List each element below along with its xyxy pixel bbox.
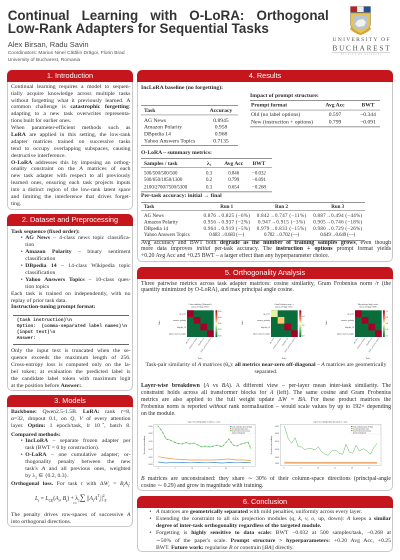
chart: layer-wise similarity of A matrices: 20 xyxy=(225,468,227,470)
chart: layer-wise similarity of BA product xyxy=(270,420,382,470)
chart: Gram Frobenius norm heatmap: 0.4 xyxy=(302,316,304,318)
text block: task sequence: • xyxy=(21,249,23,255)
text block: compared methods xyxy=(11,432,130,480)
chart: layer-wise similarity of A matrices: 0.000 xyxy=(148,464,153,466)
table: prompt structure: New (instruction + options) xyxy=(251,118,313,126)
chart: Gram Frobenius norm heatmap: Gram Frobenius norm / r xyxy=(275,304,294,306)
table: per-task accuracy: 0.979→0.833 (−15%) xyxy=(257,226,307,231)
chart: layer-wise similarity of BA product: 25 xyxy=(368,468,370,470)
text block: layer-wise breakdown: Frobenius norm is reported without rank normalisation – would scale values by up to 192× depending xyxy=(141,404,391,410)
chart: Gram Frobenius norm heatmap: (mean off-diag: 0.001) xyxy=(275,306,293,309)
text block: layer-wise breakdown: on the module. xyxy=(141,411,176,417)
table: IncLoRA accuracy: DBpedia 14 xyxy=(144,132,171,138)
chart: layer-wise similarity of BA product: Layer-wise orthogonality: BA matrices – mean xyxy=(314,420,347,424)
chart: cosine similarity heatmap: dbpedia_14 xyxy=(177,327,186,329)
chart: max principal angle cosine heatmap: yahoo_answers_topics xyxy=(337,334,354,336)
panel: orthogonality analysis xyxy=(137,267,393,491)
text block: compared methods: Compared methods: xyxy=(11,432,61,438)
table: per-task accuracy: 0.649→0.649 (—) xyxy=(320,232,356,237)
text block: layer-wise breakdown xyxy=(141,383,391,417)
table: per-task accuracy: 0.905→0.746 (−18%) xyxy=(313,220,363,225)
heading: 6. Conclusion: 6. Conclusion xyxy=(243,497,287,506)
chart: layer-wise similarity of BA product: 15 xyxy=(334,468,336,470)
table: prompt structure: BWT xyxy=(361,102,375,108)
chart: layer-wise similarity of BA product: Gram Frobenius norm (mean) xyxy=(353,429,371,432)
chart: layer-wise similarity of A matrices: 10 xyxy=(191,468,193,470)
text block: truncation and loss: at the position before Answer:. xyxy=(11,383,83,389)
table: O-LoRA summary metrics: 0.654 xyxy=(228,185,240,190)
text block: penalty effect xyxy=(11,512,130,525)
table: O-LoRA summary metrics: −0.032 xyxy=(252,171,266,176)
chart: max principal angle cosine heatmap: ag_news xyxy=(353,337,359,345)
table: per-task accuracy: Run 1 xyxy=(220,204,234,209)
table: O-LoRA summary metrics xyxy=(141,158,272,192)
text block: conclusions xyxy=(149,509,391,551)
text block: task sequence: Instruction-tuning prompt format: xyxy=(11,304,96,310)
table: prompt structure: 0.799 xyxy=(329,120,341,126)
chart: layer-wise similarity of A matrices: cosine similarity (mean off-diag) xyxy=(232,425,252,428)
text block: pairwise metrics: Three pairwise metrics across task adapter matrices: cosine similarity, Gram Frobenius norm /r (the xyxy=(141,280,391,286)
chart: layer-wise similarity of BA product: cosine similarity (mean off-diag) xyxy=(353,425,373,428)
chart: layer-wise similarity of BA product: 0.000 xyxy=(275,463,279,465)
table: IncLoRA accuracy: 0.8945 xyxy=(213,118,229,124)
text block: introduction: tions built for earlier ones. xyxy=(11,118,71,124)
text block: task sequence: classification xyxy=(25,270,55,276)
table: O-LoRA summary metrics: BWT xyxy=(253,161,266,167)
chart: layer-wise similarity of BA product: 0 xyxy=(284,468,285,470)
chart: layer-wise similarity of BA product: max principal angle cosine xyxy=(353,427,369,430)
chart: cosine similarity heatmap: Cosine similarity (Rademach) xyxy=(189,303,212,306)
table: per-task accuracy: 0.887→0.494 (−44%) xyxy=(313,214,363,219)
chart: cosine similarity heatmap: (mean off-diag: 0.003) xyxy=(191,306,209,309)
text block: task sequence: Yahoo Answers Topics – 10-class ques- xyxy=(25,277,130,283)
text block: compared methods: • xyxy=(21,438,23,444)
chart: Gram Frobenius norm heatmap: ag_news xyxy=(269,337,275,345)
chart: layer-wise similarity of A matrices: Gram Frobenius norm (mean) xyxy=(232,429,250,432)
chart: layer-wise similarity of BA product: Mean inter-task similarity xyxy=(271,436,273,454)
title: Low-Rank Adapters for Sequential Tasks xyxy=(8,21,269,36)
chart: Gram Frobenius norm heatmap: amazon_polarity xyxy=(257,320,270,322)
table: prompt structure: −0.091 xyxy=(360,120,376,126)
chart: Gram Frobenius norm heatmap: dbpedia_14 xyxy=(261,327,270,329)
text block: task sequence: • xyxy=(21,277,23,283)
table: per-task accuracy: 0.702→0.702 (—) xyxy=(264,232,299,237)
table: O-LoRA summary metrics: 0.3 xyxy=(206,185,213,190)
text block: compared methods: by λ1 ∈ {0.2, 0.3}. xyxy=(25,473,69,480)
chart: max principal angle cosine heatmap: dbpedia_14 xyxy=(345,327,354,329)
text block: compared methods: IncLoRA – separate frozen adapter per xyxy=(25,438,130,444)
text block: truncation and loss: Cross-entropy loss is computed only on the la- xyxy=(11,362,130,368)
heading: 3. Models xyxy=(7,395,133,407)
chart: max principal angle cosine heatmap: Max principal angle cosine xyxy=(358,303,378,306)
text block: introduction: LoRA are applied in this setting, the low-rank xyxy=(11,132,130,138)
chart: Gram Frobenius norm heatmap: 0.0 xyxy=(302,336,304,338)
chart: layer-wise similarity of BA product: 0.010 xyxy=(275,449,279,451)
chart: cosine similarity heatmap: amazon_polarity xyxy=(189,338,198,349)
text block: introduction: destructive interference. xyxy=(11,153,66,159)
text block: backbone: α=32, dropout 0.1, on Q, V of every attention xyxy=(11,416,130,422)
text block: introduction: Continual learning requires a model to sequen- xyxy=(11,84,130,90)
text block: conclusions: BWT. Future work: regularise B or constrain ||BA|| directly. xyxy=(156,545,294,551)
chart: layer-wise similarity of A matrices: 15 xyxy=(208,468,210,470)
chart: layer-wise similarity of A matrices: Mean inter-task similarity xyxy=(144,436,146,454)
text block: task sequence: Amazon Polarity – binary sentiment xyxy=(25,249,130,255)
text block: compared methods: • xyxy=(21,452,23,458)
table: prompt structure: Avg Acc xyxy=(325,102,345,108)
table: per-task accuracy: 0.947→0.915 (−3%) xyxy=(258,220,305,225)
text block: conclusions: ∼50% of the paper's scale. Prompt structure > hyperparameters: +0.20 Avg Acc, +0.25 xyxy=(156,538,391,544)
heading: 1. Introduction xyxy=(7,70,133,82)
logo wordmark: FACULTY OF SCIENCES xyxy=(341,53,381,56)
panel: models xyxy=(7,395,133,527)
text block: task sequence xyxy=(11,229,130,310)
text block: B matrices xyxy=(141,476,391,489)
text block: layer-wise breakdown: constraint holds across all transformer blocks for A (left). The same cosine and Gram Frobenius xyxy=(141,390,391,396)
table: O-LoRA summary metrics: Avg Acc xyxy=(224,161,244,167)
text block: compared methods: thogonality penalty between the new xyxy=(25,459,130,465)
chart: cosine similarity heatmap: Task i xyxy=(159,320,161,325)
icon: crest xyxy=(350,6,371,35)
chart: cosine similarity heatmap xyxy=(158,303,222,360)
table: per-task accuracy: Amazon Polarity xyxy=(144,220,179,225)
chart: cosine similarity heatmap: yahoo_answers_topics xyxy=(200,338,212,353)
text block: introduction: O-LoRA addresses this by imposing an orthog- xyxy=(11,160,130,166)
text block: introduction: new task adapter with respect to all previously xyxy=(11,173,130,179)
text block: results summary: Avg accuracy and BWT both degrade as the number of training samples grows, even though xyxy=(141,240,391,246)
heading: per-task accuracy: Per-task accuracy: initial → final xyxy=(141,193,222,199)
chart: max principal angle cosine heatmap: amazon_polarity xyxy=(357,338,366,349)
logo: University of Bucharest xyxy=(332,6,390,56)
text block: task sequence: Task sequence (fixed order): xyxy=(11,229,80,235)
text block: introduction: tend to occupy overlapping subspaces, causing xyxy=(11,146,130,152)
chart: max principal angle cosine heatmap: 0.4 xyxy=(386,329,388,331)
chart: layer-wise similarity of BA product: 10 xyxy=(317,468,319,470)
logo wordmark xyxy=(332,37,390,56)
caption: heatmaps: separated. xyxy=(255,369,277,375)
table: O-LoRA summary metrics: 2100/2700/7500/5300 xyxy=(144,185,188,190)
text block: truncation and loss: Only the input text is truncated when the se- xyxy=(11,348,130,354)
chart: cosine similarity heatmap: 0.20 xyxy=(218,329,221,331)
table: per-task accuracy: 0.876→0.825 (−6%) xyxy=(203,214,250,219)
caption: heatmaps xyxy=(146,362,386,375)
chart: max principal angle cosine heatmap: yahoo_answers_topics xyxy=(368,338,380,353)
title: Continual Learning with O-LoRA: Orthogonal xyxy=(8,8,329,22)
panel: introduction xyxy=(7,70,133,210)
table: prompt structure: Prompt format xyxy=(251,102,287,108)
chart: cosine similarity heatmap: 0.60 xyxy=(218,317,221,319)
chart: max principal angle cosine heatmap: 0.2 xyxy=(386,336,388,338)
chart: layer-wise similarity of BA product: baseline (orthogonal) xyxy=(353,431,366,434)
text block: introduction: adapting to a new task overwrites representa- xyxy=(11,111,130,117)
text block: backbone xyxy=(11,409,130,429)
table: IncLoRA accuracy xyxy=(141,105,238,146)
chart: cosine similarity heatmap: yahoo_answers_topics xyxy=(169,334,186,336)
chart: layer-wise similarity of A matrices: Layer-wise orthogonality: A matrices – mean xyxy=(188,420,220,424)
text block: conclusions: Extending the constraint to all six projection modules (q, k, v, o, up, down): A keeps a similar xyxy=(156,516,391,522)
text block: introduction: learned ones, ensuring each task projects inputs xyxy=(11,180,130,186)
heading: 5. Orthogonality Analysis: 5. Orthogonality Analysis xyxy=(225,268,305,277)
chart: Gram Frobenius norm heatmap: Task j xyxy=(282,358,287,360)
table: IncLoRA accuracy: Accuracy xyxy=(210,108,233,114)
text block: penalty effect: The penalty drives row-spaces of successive A xyxy=(11,512,130,518)
panel: dataset and preprocessing xyxy=(7,214,133,391)
text block: introduction: into a distinct region of the low-rank latent space xyxy=(11,187,130,193)
text block: truncation and loss: quence exceeds the maximum length of 256. xyxy=(11,355,130,361)
text block: truncation and loss: bel token; at evaluation the predicted label is xyxy=(11,369,130,375)
table: O-LoRA summary metrics: Samples / task xyxy=(144,161,179,167)
table: prompt structure: Old (no label options) xyxy=(251,111,300,118)
chart: max principal angle cosine heatmap: 1.0 xyxy=(386,311,388,313)
table: O-LoRA summary metrics: −0.268 xyxy=(252,185,266,190)
text block: layer-wise breakdown: metrics are also applied to the full weight update ΔW = BA. For these product matrices the xyxy=(141,397,391,403)
text block: penalty effect: into orthogonal directions. xyxy=(11,519,71,525)
table: O-LoRA summary metrics: 500/650/1850/1300 xyxy=(144,178,183,183)
chart: max principal angle cosine heatmap: (mean off-diag: 0.008) xyxy=(359,306,377,309)
text block: introduction: adapter matrices trained on successive tasks xyxy=(11,139,130,145)
text block: task sequence: tion topics xyxy=(25,284,49,290)
chart: layer-wise similarity of BA product: 0.015 xyxy=(275,441,279,443)
header: title, authors and logo xyxy=(8,6,390,63)
table: per-task accuracy: DBpedia 14 xyxy=(144,226,169,231)
text block: truncation and loss: the candidate label token with maximum logit xyxy=(11,376,130,382)
table: O-LoRA summary metrics: 0.846 xyxy=(228,171,240,176)
text block: B matrices: cosine ∼ 0.29) and grow in magnitude with training. xyxy=(141,483,263,489)
coordinators: Coordinators: Marius Ninel Cătălin Drăgoi, Florin Brad xyxy=(8,51,125,56)
chart: layer-wise similarity of A matrices: 0.015 xyxy=(148,441,153,443)
panel: results xyxy=(137,70,393,262)
chart: Gram Frobenius norm heatmap: dbpedia_14 xyxy=(282,338,289,346)
table: per-task accuracy: AG News xyxy=(144,214,164,219)
chart: layer-wise similarity of BA product: 0.005 xyxy=(275,457,279,459)
table: IncLoRA accuracy: Yahoo Answers Topics xyxy=(144,138,195,144)
text block: task sequence: • xyxy=(21,235,23,241)
table: per-task accuracy: Yahoo Answers Topics xyxy=(144,232,190,237)
table: O-LoRA summary metrics: 0.799 xyxy=(228,178,240,183)
chart: Gram Frobenius norm heatmap: yahoo_answers_topics xyxy=(284,338,296,353)
text block: introduction: tially acquire knowledge across multiple tasks xyxy=(11,91,130,97)
text block: pairwise metrics: quantity minimized by O-LoRA), and max principal angle cosine. xyxy=(141,287,294,293)
heading: 2. Dataset and Preprocessing: 2. Dataset and Preprocessing xyxy=(22,215,118,224)
text block: task sequence: AG News – 4-class news topic classifica- xyxy=(25,235,130,241)
table: per-task accuracy: 0.980→0.729 (−26%) xyxy=(313,226,363,231)
table: O-LoRA summary metrics: 0.3 xyxy=(206,171,213,176)
chart: cosine similarity heatmap: 0.80 xyxy=(218,311,221,313)
chart: layer-wise similarity of BA product: 20 xyxy=(351,468,353,470)
text block: introduction: When parameter-efficient methods such as xyxy=(11,125,130,131)
text block: task sequence: DBpedia 14 – 14-class Wikipedia topic xyxy=(25,263,130,269)
table: per-task accuracy: Run 3 xyxy=(331,204,345,209)
chart: layer-wise similarity of A matrices: 0.010 xyxy=(148,449,153,451)
chart: Gram Frobenius norm heatmap xyxy=(242,304,304,360)
chart: max principal angle cosine heatmap: dbpedia_14 xyxy=(366,338,373,346)
text block: introduction: onality constraint on the A matrices of each xyxy=(11,166,130,172)
chart: layer-wise similarity of A matrices: 0.020 xyxy=(148,433,153,435)
table: O-LoRA summary metrics: λ₁ xyxy=(207,161,212,167)
chart: Gram Frobenius norm heatmap: Task i xyxy=(242,320,244,325)
text block: introduction: and limiting the interference that drives forget- xyxy=(11,194,130,200)
chart: layer-wise similarity of A matrices xyxy=(144,420,256,470)
chart: layer-wise similarity of A matrices: 25 xyxy=(242,468,244,470)
table: per-task accuracy: 0.956→0.937 (−2%) xyxy=(203,220,250,225)
heading: 3. Models: 3. Models xyxy=(54,396,86,405)
chart: max principal angle cosine heatmap: amazon_polarity xyxy=(341,320,354,322)
text block: introduction: without forgetting what it previously learned. A xyxy=(11,98,130,104)
title xyxy=(8,8,329,36)
text block: introduction: ting. xyxy=(11,201,21,207)
table: IncLoRA accuracy: Task xyxy=(144,108,156,114)
table: per-task accuracy: 0.683→0.683 (—) xyxy=(209,232,245,237)
text block: results summary: +0.20 Avg Acc and +0.25 BWT – a larger effect than any hyperparameter choice. xyxy=(141,253,329,259)
table: prompt structure xyxy=(250,100,380,128)
affiliation: University of Bucharest, Romania xyxy=(8,58,80,63)
text block: layer-wise breakdown: Layer-wise breakdown (A vs BA). A different view – per-layer mean inter-task similarity. The xyxy=(141,383,391,389)
text block: compared methods: task's A and all previous ones, weighted xyxy=(25,466,130,472)
table: per-task accuracy: 0.964→0.919 (−5%) xyxy=(203,226,250,231)
chart: layer-wise similarity of BA product: 5 xyxy=(301,468,302,470)
heading: 6. Conclusion xyxy=(137,496,393,508)
chart: layer-wise similarity of BA product: 0.025 xyxy=(275,426,279,428)
table: O-LoRA summary metrics: 0.2 xyxy=(206,178,213,183)
table: IncLoRA accuracy: AG News xyxy=(144,118,166,124)
heading: 4. Results: 4. Results xyxy=(249,71,281,80)
text block: conclusions: A matrices are geometrically separated with mild penalties, uniformly across every layer. xyxy=(156,509,362,515)
panel: conclusion: • xyxy=(149,530,151,536)
table: O-LoRA summary metrics: −0.091 xyxy=(252,178,266,183)
chart: Gram Frobenius norm heatmap: ag_news xyxy=(263,312,270,316)
text block: task sequence: • xyxy=(21,263,23,269)
logo wordmark: UNIVERSITY OF xyxy=(332,37,390,43)
chart: layer-wise similarity of A matrices: 0.005 xyxy=(148,457,153,459)
chart: cosine similarity heatmap: amazon_polarity xyxy=(173,320,186,322)
chart: layer-wise similarity of A matrices: 0 xyxy=(158,468,159,470)
caption: heatmaps: Task-pair similarity of A matrices (θ₀): all metrics near-zero off-diagonal – A matrices are geometrically xyxy=(146,362,386,368)
table: O-LoRA summary metrics: 500/500/500/500 xyxy=(144,171,178,176)
chart: cosine similarity heatmap: ag_news xyxy=(185,337,191,345)
heading: IncLoRA baseline: IncLoRA baseline (no forgetting): xyxy=(141,84,223,90)
panel: conclusion xyxy=(137,496,393,552)
text block: compared methods: O-LoRA – one cumulative adapter; or- xyxy=(25,452,130,458)
chart: layer-wise similarity of A matrices: max principal angle cosine xyxy=(232,427,248,430)
table: per-task accuracy: 0.842→0.747 (−11%) xyxy=(257,214,307,219)
chart: Gram Frobenius norm heatmap: amazon_polarity xyxy=(273,338,282,349)
text block: task sequence: classification xyxy=(25,256,55,262)
chart: cosine similarity heatmap: dbpedia_14 xyxy=(198,338,205,346)
chart: cosine similarity heatmap: ag_news xyxy=(179,312,186,316)
text block: introduction xyxy=(11,84,130,207)
text block: task sequence: replay of prior task data. xyxy=(11,298,67,304)
table: per-task accuracy: Run 2 xyxy=(275,204,288,209)
text block: truncation and loss xyxy=(11,348,130,389)
table: per-task accuracy xyxy=(141,202,365,241)
chart: cosine similarity heatmap: 0.40 xyxy=(218,323,221,325)
text block: backbone: Backbone: Qwen2.5-1.5B. LoRA: rank r=8, xyxy=(11,409,130,415)
chart: max principal angle cosine heatmap: Task j xyxy=(366,358,371,360)
chart: max principal angle cosine heatmap: Task i xyxy=(326,320,328,325)
text block: results summary: more data improves initial per-task accuracy. The instruction + options prompt format yields xyxy=(141,246,391,252)
heading: 2. Dataset and Preprocessing xyxy=(7,214,133,226)
chart: layer-wise similarity of A matrices: 0.025 xyxy=(148,426,153,428)
heading: O-LoRA summary metrics: O-LoRA – summary metrics: xyxy=(141,150,212,156)
chart: max principal angle cosine heatmap xyxy=(326,303,388,360)
text block: conclusions: degree of inter-task orthogonality regardless of the targeted module. xyxy=(156,523,321,529)
table: IncLoRA accuracy: 0.958 xyxy=(215,124,227,130)
authors: Alex Birsan, Radu Savin xyxy=(8,40,89,49)
chart: layer-wise similarity of BA product: 0.020 xyxy=(275,433,279,435)
chart: cosine similarity heatmap: 0.00 xyxy=(218,336,221,338)
panel: conclusion: • xyxy=(149,509,151,515)
text block: results summary xyxy=(141,240,391,259)
formula: orthogonal loss: Lt = LCE(At, Bt) + λ1∑ ||AtAT i||2 F xyxy=(35,492,107,503)
chart: max principal angle cosine heatmap: ag_news xyxy=(347,312,354,316)
text block: compared methods: task (BWT = 0 by construction). xyxy=(25,445,99,451)
code block: prompt format: (task instruction)\n Option: (comma-separated label names)\n (input text)\n Answer: xyxy=(17,318,127,341)
text block: pairwise metrics xyxy=(141,280,391,293)
chart: layer-wise similarity of A matrices: baseline (orthogonal) xyxy=(232,431,245,434)
chart: max principal angle cosine heatmap: 0.8 xyxy=(386,317,388,319)
table: IncLoRA accuracy: Amazon Polarity xyxy=(144,124,182,130)
heading: 4. Results xyxy=(137,70,393,82)
chart: layer-wise similarity of A matrices: 5 xyxy=(175,468,176,470)
table: prompt structure: −0.344 xyxy=(360,112,376,118)
table: per-task accuracy: Task xyxy=(144,204,154,209)
chart: Gram Frobenius norm heatmap: yahoo_answers_topics xyxy=(253,334,270,336)
text block: conclusions: Forgetting is highly sensitive to data scale: BWT −0.032 at 500 samples/task, −0.268 at xyxy=(156,530,391,536)
text block: task sequence: Each task is trained on independently, with no xyxy=(11,291,130,297)
chart: cosine similarity heatmap: Task j xyxy=(198,358,203,360)
text block: task sequence: tion xyxy=(25,242,34,248)
table: IncLoRA accuracy: 0.968 xyxy=(215,132,227,138)
logo wordmark: BUCHAREST xyxy=(332,44,390,52)
table: IncLoRA accuracy: 0.7135 xyxy=(213,138,229,144)
panel: conclusion: • xyxy=(149,516,151,522)
heading: prompt structure: Impact of prompt structure: xyxy=(250,92,319,98)
heading: 5. Orthogonality Analysis xyxy=(137,267,393,279)
text block: introduction: common challenge is catastrophic forgetting: xyxy=(11,104,130,110)
heading: 1. Introduction: 1. Introduction xyxy=(47,71,93,80)
table: prompt structure: 0.597 xyxy=(329,112,341,118)
chart: max principal angle cosine heatmap: 0.6 xyxy=(386,323,388,325)
chart: Gram Frobenius norm heatmap: 0.2 xyxy=(302,325,304,327)
formula: orthogonal loss: i<t xyxy=(73,501,77,505)
text block: B matrices: B matrices are unconstrained: they share ∼ 30% of their column-space directions (principal-angle xyxy=(141,476,391,482)
